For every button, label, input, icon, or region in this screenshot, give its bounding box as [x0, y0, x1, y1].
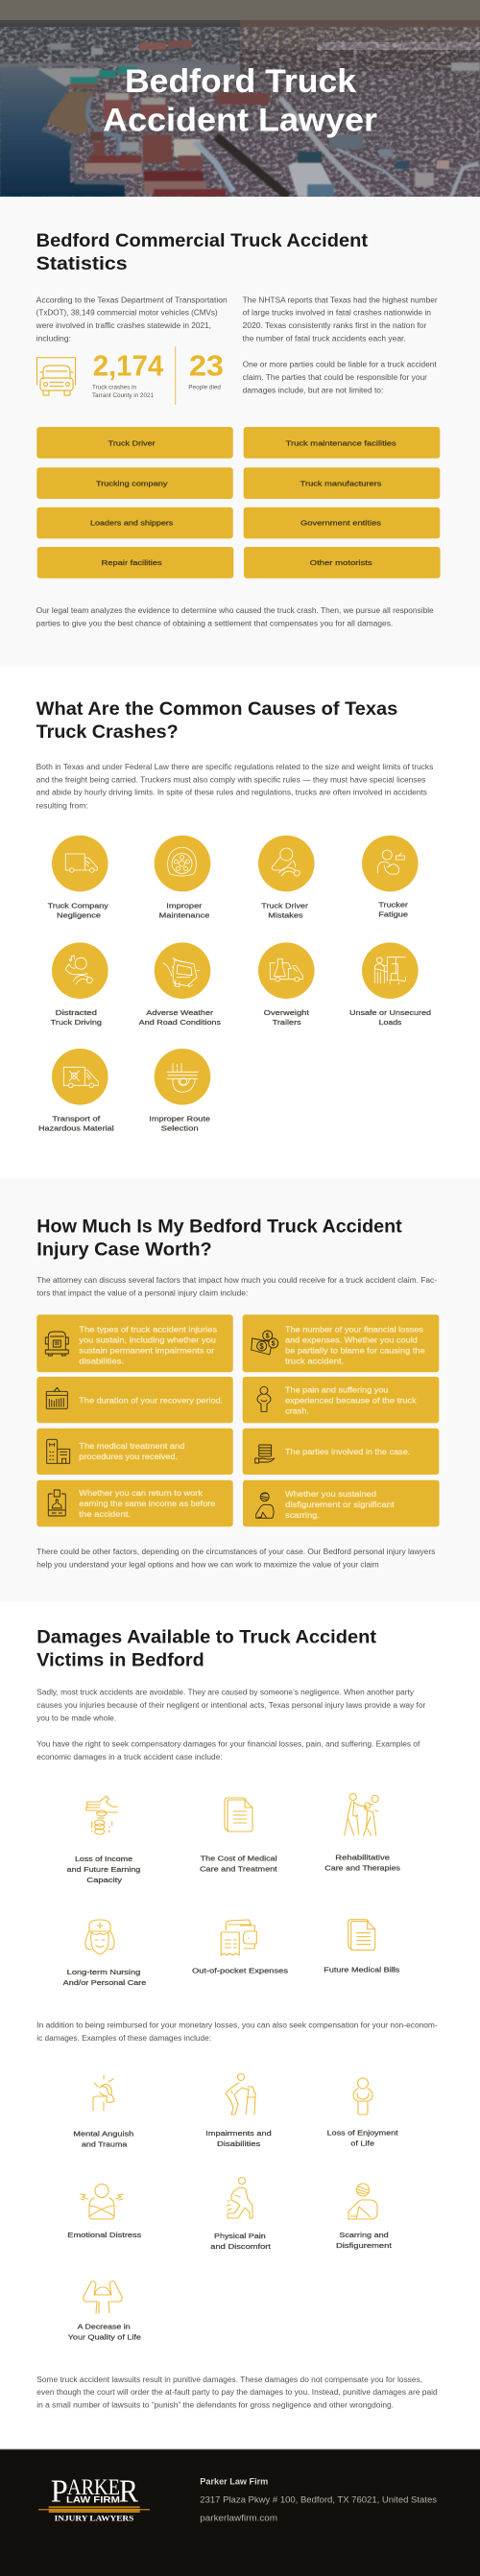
heading: causes: What Are the Common Causes of Texas [36, 698, 397, 720]
cause: trucker fatigue: Fatigue [378, 910, 408, 918]
cause: improper maintenance [155, 836, 210, 920]
card: disfigurement [243, 1480, 440, 1526]
card: financial losses: $ [266, 1334, 270, 1339]
cause: truck company negligence: Truck Company [48, 902, 108, 910]
card: financial losses: $ [259, 1342, 264, 1351]
text block: regulations: and abide by hourly driving limits. In spite of these rules and regulations, trucks are often involved in accidents [36, 789, 427, 797]
heading: statistics: Bedford Commercial Truck Accident [36, 230, 369, 251]
damage: physical pain: Physical Pain [214, 2232, 266, 2240]
cause: trucker fatigue [362, 836, 419, 918]
cause: distracted truck driving: Distracted [56, 1008, 97, 1017]
button: maintenance: Truck maintenance facilities [286, 438, 396, 447]
card: return to work: the accident. [79, 1510, 131, 1519]
damage: loss of income: Loss of Income [75, 1855, 132, 1863]
button: repair [37, 547, 233, 579]
damage: impairments: Impairments and [205, 2129, 272, 2138]
text block: factors intro: The attorney can discuss several factors that impact how much you could receive for a truck accident claim. Fac- [36, 1276, 437, 1285]
damage: rehabilitative care: Care and Therapies [324, 1864, 400, 1873]
button: loaders: Loaders and shippers [90, 519, 174, 528]
text block: negligence: you to be made whole. [36, 1713, 116, 1722]
card: financial losses: and expenses. Whether you could [285, 1336, 418, 1345]
cause: improper maintenance: Improper [166, 902, 203, 910]
stat: people died: People died [188, 384, 221, 390]
card: pain and suffering [243, 1377, 439, 1423]
heading: damages [36, 1626, 377, 1670]
button: government [244, 508, 440, 538]
damage: loss of income: Capacity [86, 1876, 122, 1884]
damage: loss of income: and Future Earning [67, 1865, 140, 1874]
cause: improper route selection [149, 1049, 210, 1133]
damage: scarring [336, 2184, 393, 2250]
damage: loss of enjoyment: Loss of Enjoyment [327, 2128, 399, 2138]
text block: negligence [36, 1689, 426, 1722]
text block: NHTSA: of large trucks involved in fatal crashes nationwide in [243, 309, 431, 318]
damage: long-term nursing: Long-term Nursing [67, 1968, 140, 1976]
cause: truck company negligence: Negligence [57, 911, 101, 920]
stat: truck crashes: 2,174 [93, 349, 164, 382]
card: pain and suffering: The pain and suffering you [285, 1386, 388, 1395]
heading: case worth: Injury Case Worth? [36, 1239, 212, 1260]
hero title: Bedford Truck [125, 63, 356, 100]
hero top band [0, 0, 480, 20]
text block: negligence: Sadly, most truck accidents are avoidable. They are caused by someone’s negligence. When another party [36, 1689, 414, 1697]
damage: impairments: Disabilities [217, 2139, 261, 2148]
damage: medical cost: The Cost of Medical [201, 1854, 277, 1862]
heading: case worth: How Much Is My Bedford Truck Accident [36, 1216, 402, 1237]
text block: punitive damages [36, 2375, 438, 2409]
cause: unsafe or unsecured loads [349, 942, 431, 1027]
logo: Parker Law Firm [38, 2474, 150, 2523]
text block: TxDOT intro [36, 295, 228, 343]
heading: causes [36, 698, 397, 743]
card: disfigurement: scarring. [285, 1511, 320, 1520]
damage: scarring: Scarring and [339, 2231, 389, 2239]
text block: non-economic damages [36, 2021, 438, 2043]
text block: other factors: There could be other factors, depending on the circumstances of your case. Our Bedford personal injury lawyers [36, 1548, 435, 1556]
cause: overweight trailers: Overweight [264, 1008, 310, 1017]
damage: mental anguish: and Trauma [82, 2140, 128, 2149]
text block: liable parties: claim. The parties that could be responsible for your [243, 373, 427, 382]
button: maintenance [244, 427, 440, 459]
heading: damages: Damages Available to Truck Accident [36, 1626, 377, 1647]
text block: liable parties [243, 361, 437, 395]
text block: punitive damages: Some truck accident lawsuits result in punitive damages. These damages do not compensate you for losses, [36, 2375, 422, 2384]
text block: NHTSA: The NHTSA reports that Texas had the highest number [243, 295, 438, 304]
logo: Parker Law Firm: R [119, 2474, 138, 2510]
text block: non-economic damages: In addition to being reimbursed for your monetary losses, you can also seek compensation for your non-econom- [36, 2021, 438, 2030]
logo: Parker Law Firm: INJURY LAWYERS [55, 2514, 134, 2523]
card: injury types: you sustain, including whether you [79, 1336, 216, 1345]
card: financial losses [243, 1314, 439, 1372]
card: disfigurement: Whether you sustained [285, 1490, 376, 1499]
button: trucking company: Trucking company [96, 480, 168, 488]
text block: TxDOT intro: According to the Texas Department of Transportation [36, 295, 228, 304]
text block: non-economic damages: ic damages. Examples of these damages include: [36, 2034, 211, 2043]
contact details: 2317 Plaza Pkwy # 100, Bedford, TX 76021, United States [200, 2495, 438, 2505]
cause: truck company negligence [48, 836, 108, 920]
card: medical treatment: The medical treatment and [79, 1442, 184, 1451]
cause: truck driver mistakes: Truck Driver [261, 902, 309, 910]
heading: statistics: Statistics [36, 253, 128, 274]
heading: case worth [36, 1216, 402, 1260]
damage: medical cost: Care and Treatment [200, 1864, 278, 1873]
button: repair: Repair facilities [102, 558, 162, 567]
contact details [200, 2477, 438, 2523]
damage: loss of enjoyment [327, 2078, 399, 2147]
text block: TxDOT intro: including: [36, 335, 71, 343]
text block: other factors [36, 1548, 435, 1569]
liable party buttons [36, 427, 441, 579]
text block: legal team: parties to give you the best chance of obtaining a settlement that compensates you for all damages. [36, 620, 393, 627]
button: trucking company [36, 467, 233, 499]
heading: causes: Truck Crashes? [36, 721, 179, 743]
text block: TxDOT intro: were involved in traffic crashes statewide in 2021, [36, 321, 211, 330]
card: injury types: disabilities. [79, 1358, 124, 1366]
text block: punitive damages: even though the court will order the at-fault party to pay the damages to you. Instead, punitive damages are paid [36, 2388, 438, 2397]
card: return to work: Whether you can return to work [79, 1489, 204, 1498]
card: return to work [36, 1480, 233, 1526]
panel: statistics section [0, 197, 480, 667]
text block: punitive damages: in a small number of lawsuits to “punish” the defendants for gross negligence and other wrongdoing. [36, 2400, 394, 2409]
button: motorists [244, 547, 441, 579]
damage: scarring: Disfigurement [336, 2241, 393, 2250]
text block: other factors: help you understand your legal options and how we can work to maximize the value of your claim [36, 1560, 379, 1569]
card: injury types [36, 1314, 233, 1372]
damage: future medical bills [324, 1920, 400, 1974]
damage: medical cost [200, 1798, 278, 1873]
card: financial losses: be partially to blame for causing the [285, 1347, 425, 1356]
damage: rehabilitative care [324, 1794, 400, 1873]
button: manufacturers: Truck manufacturers [300, 480, 382, 488]
damage: emotional distress: Emotional Distress [67, 2231, 142, 2239]
panel: common causes section [36, 698, 433, 1133]
text block: compensatory damages: economic damages in a truck accident case include: [36, 1753, 223, 1761]
damage: future medical bills: Future Medical Bills [324, 1966, 400, 1974]
card: injury types: sustain permanent impairments or [79, 1347, 215, 1356]
damage: impairments [205, 2074, 272, 2148]
card: recovery duration: The duration of your recovery period. [79, 1397, 223, 1406]
card: recovery duration [36, 1377, 233, 1423]
damage: physical pain [210, 2178, 272, 2251]
cause: improper maintenance: Maintenance [159, 911, 209, 920]
cause: hazardous material: Hazardous Material [38, 1124, 114, 1133]
damage: long-term nursing [63, 1920, 146, 1987]
cause: distracted truck driving: Truck Driving [51, 1018, 102, 1027]
damage: loss of enjoyment: of Life [350, 2139, 374, 2147]
damage: out-of-pocket expenses [192, 1920, 288, 1974]
text block: legal team [36, 606, 434, 627]
hero photo: aerial view of waterfront town [0, 20, 480, 197]
cause: hazardous material [38, 1049, 114, 1133]
footer [0, 2448, 480, 2576]
text block: regulations: Both in Texas and under Federal Law there are specific regulations related to the size and weight limits of trucks [36, 763, 433, 771]
hero title: Accident Lawyer [103, 102, 377, 138]
damage: physical pain: and Discomfort [210, 2242, 272, 2251]
cause: trucker fatigue: Trucker [378, 900, 409, 909]
text block: NHTSA: the number of fatal truck accidents each year. [243, 335, 406, 343]
text block: regulations: and the freight being carried. Truckers must also comply with specific rules — they must have special licenses [36, 775, 425, 784]
cause: adverse weather [139, 942, 221, 1027]
contact details: parkerlawfirm.com [200, 2514, 277, 2523]
text block: liable parties: One or more parties could be liable for a truck accident [243, 361, 437, 369]
button: loaders [36, 508, 233, 538]
text block: regulations: resulting from: [36, 801, 88, 810]
damage: emotional distress [67, 2184, 142, 2239]
logo: Parker Law Firm: P [51, 2474, 68, 2510]
damage: out-of-pocket expenses: Out-of-pocket Expenses [192, 1966, 288, 1974]
button: government: Government entities [300, 519, 381, 528]
heading: damages: Victims in Bedford [36, 1649, 204, 1670]
damage: decrease in quality of life: A Decrease in [78, 2322, 131, 2330]
button: motorists: Other motorists [310, 558, 372, 567]
damage: loss of income [67, 1796, 140, 1884]
logo: Parker Law Firm: LAW FIRM [66, 2494, 120, 2504]
damage: mental anguish [73, 2075, 133, 2149]
card: financial losses: $ [272, 1341, 276, 1347]
stat: people died: 23 [189, 349, 224, 382]
cause: unsafe or unsecured loads: Loads [379, 1018, 402, 1027]
cause: hazardous material: Transport of [52, 1115, 101, 1123]
card: financial losses: The number of your financial losses [285, 1326, 423, 1335]
damage: long-term nursing: And/or Personal Care [63, 1978, 146, 1987]
hero banner [0, 0, 480, 197]
text block: regulations [36, 763, 433, 810]
cause: overweight trailers: Trailers [273, 1018, 301, 1027]
damage: decrease in quality of life [68, 2281, 141, 2341]
stat: truck crashes: Truck crashes in [92, 384, 136, 390]
contact details: Parker Law Firm [200, 2477, 268, 2487]
text block: factors intro: tors that impact the value of a personal injury claim include: [36, 1289, 248, 1298]
cause: improper route selection: Selection [161, 1124, 199, 1133]
panel: damages section [36, 1626, 438, 2409]
cause: improper route selection: Improper Route [149, 1115, 210, 1123]
cause: distracted truck driving [51, 942, 108, 1027]
damage: decrease in quality of life: Your Quality of Life [68, 2332, 141, 2341]
button: truck driver [36, 427, 233, 459]
stat: truck crashes: Tarrant County in 2021 [92, 392, 154, 399]
text block: compensatory damages: You have the right to seek compensatory damages for your financial losses, pain, and suffering. Examples of [36, 1739, 420, 1748]
card: pain and suffering: experienced because of the truck [285, 1397, 418, 1406]
text block: liable parties: damages include, but are not limited to: [243, 386, 383, 395]
button: manufacturers [244, 467, 440, 499]
card: pain and suffering: crash. [285, 1407, 309, 1416]
cause: truck driver mistakes [258, 836, 315, 920]
cause: overweight trailers [258, 942, 315, 1027]
card: parties involved: The parties involved in the case. [285, 1448, 410, 1456]
text block: legal team: Our legal team analyzes the evidence to determine who caused the truck crash. Then, we pursue all responsible [36, 606, 434, 615]
card: parties involved [243, 1429, 439, 1475]
button: truck driver: Truck Driver [108, 438, 156, 447]
text block: NHTSA [243, 295, 438, 343]
damage: rehabilitative care: Rehabilitative [335, 1854, 390, 1862]
text block: TxDOT intro: (TxDOT), 38,149 commercial motor vehicles (CMVs) [36, 309, 218, 318]
logo: Parker Law Firm: ARKE [67, 2475, 120, 2499]
cause: adverse weather: Adverse Weather [146, 1008, 214, 1017]
damage: mental anguish: Mental Anguish [73, 2130, 133, 2139]
stat: truck crashes [92, 349, 164, 399]
card: medical treatment: procedures you received. [79, 1453, 178, 1461]
cause: adverse weather: And Road Conditions [139, 1018, 221, 1027]
hero title [103, 63, 377, 138]
heading: statistics [36, 230, 369, 274]
text block: compensatory damages [36, 1739, 420, 1761]
card: disfigurement: disfigurement or significant [285, 1501, 396, 1509]
card: medical treatment [36, 1429, 233, 1475]
card: financial losses: truck accident. [285, 1358, 344, 1366]
card: return to work: earning the same income as before [79, 1500, 216, 1508]
text block: negligence: causes you injuries because of their negligent or intentional acts, Texas personal injury laws provide a way for [36, 1701, 426, 1710]
icon: truck front [36, 358, 75, 395]
text block: NHTSA: 2020. Texas consistently ranks first in the nation for [243, 321, 427, 330]
panel: case worth section [0, 1178, 480, 1602]
cause: unsafe or unsecured loads: Unsafe or Unsecured [349, 1008, 431, 1017]
cause: truck driver mistakes: Mistakes [268, 911, 303, 920]
card: injury types: The types of truck accident injuries [79, 1326, 217, 1335]
text block: factors intro [36, 1276, 437, 1298]
